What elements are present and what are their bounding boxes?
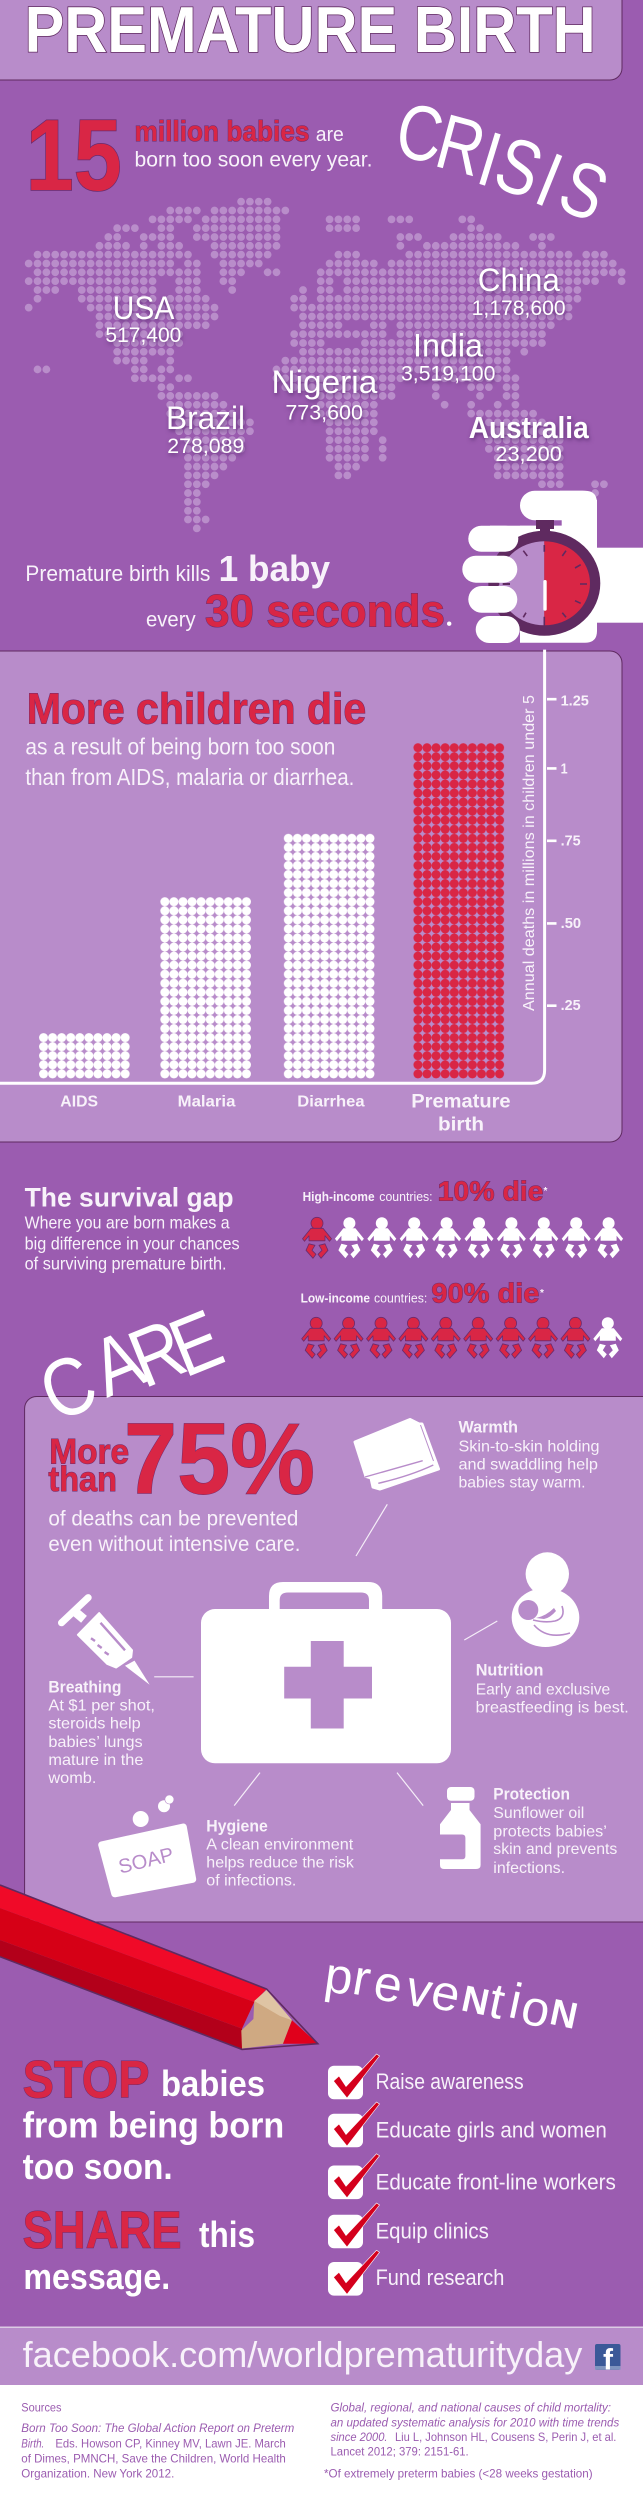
text block: nutrition: Early and exclusive: [476, 1681, 610, 1698]
icon: blanket: [355, 1420, 438, 1489]
text block: deaths prevented: even without intensive care.: [48, 1533, 300, 1556]
label: Australia: Australia: [469, 410, 589, 445]
text block: share this message: SHARE: [23, 2201, 182, 2260]
panel: facebook bar: [0, 2326, 643, 2385]
high-income heading: 10% die: [438, 1176, 543, 1207]
statement: 1 baby every 30 seconds: every: [146, 608, 196, 632]
section: survival gap text: big difference in your chances: [25, 1233, 240, 1253]
heading: care: E: [157, 1293, 235, 1395]
sources right column: Lancet 2012; 379: 2151-61.: [330, 2445, 469, 2459]
text block: stop babies: STOP: [23, 2050, 150, 2109]
heading: prevention: i: [504, 1973, 527, 2030]
label: China: [472, 262, 566, 320]
headline: 15 million babies: are: [316, 124, 344, 146]
label: Nigeria: [272, 364, 378, 425]
label: Australia: 23,200: [495, 443, 562, 466]
label: USA: 517,400: [105, 324, 181, 347]
sources left column: Organization. New York 2012.: [21, 2466, 174, 2480]
heading: prevention: [321, 1946, 581, 2039]
category labels: [60, 1092, 511, 1136]
sources left column: Eds. Howson CP, Kinney MV, Lawn JE. March: [55, 2436, 286, 2450]
heading: more children die: More children die: [27, 685, 366, 734]
item: educate girls and women: Educate girls and women: [376, 2118, 607, 2142]
panel: more children die: [0, 650, 622, 1142]
label: Australia: [469, 410, 589, 466]
label: Nigeria: Nigeria: [272, 364, 378, 400]
heading: crisis: [390, 86, 620, 238]
text block: share this message: this: [199, 2214, 255, 2255]
sources left column: Sources: [21, 2400, 62, 2414]
chart axes: .50: [561, 915, 581, 932]
heading: care: [27, 1293, 235, 1440]
low-income heading: *: [540, 1288, 544, 1299]
label: Nigeria: 773,600: [285, 402, 363, 425]
section: survival gap text: Where you are born makes a: [25, 1212, 230, 1232]
icon: first aid kit: [201, 1582, 451, 1763]
statement: 1 baby every 30 seconds: 1 baby: [219, 548, 330, 589]
text block: share this message: message.: [23, 2256, 170, 2297]
text block: breathing: womb.: [47, 1770, 96, 1787]
heading: prevention: r: [349, 1949, 375, 2007]
facebook url: facebook.com/worldprematurityday: [23, 2334, 582, 2375]
pictogram: high-income babies: [302, 1217, 623, 1258]
chart axes: 1: [561, 761, 568, 778]
heading: prevention: N: [547, 1991, 581, 2037]
statement: 1 baby every 30 seconds: [25, 548, 451, 636]
low-income heading: 90% die: [431, 1278, 539, 1309]
text block: warmth: Skin-to-skin holding: [458, 1438, 600, 1455]
item: educate front-line workers: [328, 2154, 616, 2199]
icon: red pencil: [0, 1885, 318, 2049]
headline: 15 million babies: 15: [26, 100, 122, 212]
text block: warmth: [458, 1418, 600, 1491]
label: Brazil: 278,089: [167, 435, 244, 458]
text block: hygiene: of infections.: [206, 1872, 296, 1890]
text block: protection: Sunflower oil: [493, 1805, 584, 1822]
connector lines: [154, 1504, 497, 1806]
item: fund research: [328, 2250, 504, 2296]
text block: protection: Protection: [493, 1785, 570, 1803]
heading: crisis: R: [428, 97, 494, 193]
high-income heading: *: [544, 1186, 548, 1197]
heading: more than 75%: [48, 1404, 315, 1516]
bar: malaria: [160, 897, 251, 1078]
text block: nutrition: [476, 1662, 629, 1716]
icon: facebook: f: [603, 2344, 614, 2377]
panel: sources footer: [0, 2385, 643, 2493]
label: India: [401, 327, 495, 385]
text block: warmth: and swaddling help: [458, 1456, 598, 1474]
bar: diarrhea: [284, 834, 374, 1078]
label: USA: [105, 290, 181, 347]
section: survival gap text: [25, 1183, 240, 1273]
low-income heading: Low-income: [301, 1291, 370, 1306]
label: India: India: [413, 327, 483, 363]
sources left column: of Dimes, PMNCH, Save the Children, World Health: [21, 2451, 286, 2465]
heading: prevention: o: [517, 1978, 555, 2039]
chart axes: [0, 650, 589, 1083]
text block: stop babies: from being born: [23, 2104, 284, 2146]
label: China: China: [478, 262, 560, 298]
label: China: 1,178,600: [472, 297, 566, 320]
text block: protection: infections.: [493, 1860, 565, 1877]
label: USA: USA: [113, 290, 175, 326]
item: educate girls and women: [328, 2102, 607, 2147]
bar chart: [0, 650, 589, 1136]
text block: chart intro: [25, 733, 354, 790]
text block: nutrition: Nutrition: [476, 1662, 543, 1680]
text block: breathing: At $1 per shot,: [48, 1698, 155, 1715]
text block: hygiene: Hygiene: [206, 1817, 268, 1835]
label: Brazil: Brazil: [166, 400, 245, 436]
text block: warmth: babies stay warm.: [458, 1474, 586, 1491]
checklist: [328, 2054, 616, 2296]
category labels: birth: [438, 1115, 484, 1136]
sources right column: Global, regional, and national causes of child mortality:: [330, 2400, 611, 2414]
high-income heading: [303, 1176, 548, 1207]
text block: breathing: steroids help: [48, 1716, 141, 1732]
chart axes: 1.25: [561, 692, 589, 709]
headline: 15 million babies: million babies: [134, 116, 310, 148]
map labels: [105, 262, 589, 466]
heading: crisis: I: [525, 136, 574, 223]
panel: care: [25, 1396, 643, 1922]
headline: 15 million babies: [26, 100, 373, 212]
item: educate front-line workers: Educate front-line workers: [376, 2169, 616, 2194]
text block: breathing: mature in the: [48, 1752, 143, 1769]
item: equip clinics: Equip clinics: [376, 2218, 489, 2244]
sources right column: an updated systematic analysis for 2010 with time trends: [330, 2416, 619, 2430]
bar: AIDS: [39, 1033, 130, 1078]
heading: prevention: t: [484, 1972, 510, 2030]
item: raise awareness: [328, 2054, 524, 2099]
bar: premature birth: [413, 743, 504, 1078]
category labels: Diarrhea: [297, 1094, 365, 1111]
icon: oil bottle: [440, 1787, 481, 1869]
item: equip clinics: [328, 2203, 489, 2248]
text block: warmth: Warmth: [458, 1418, 518, 1436]
text block: stop babies: too soon.: [23, 2146, 173, 2187]
heading: crisis: S: [548, 142, 620, 238]
heading: prevention: p: [321, 1946, 357, 2006]
text block: protection: protects babies’: [493, 1823, 607, 1840]
high-income heading: countries:: [379, 1189, 433, 1204]
text block: chart intro: than from AIDS, malaria or diarrhea.: [25, 764, 354, 790]
sources right column: Liu L, Johnson HL, Cousens S, Perin J, et al.: [395, 2430, 616, 2444]
heading: crisis: S: [485, 119, 553, 215]
heading: care: C: [27, 1336, 110, 1440]
text block: breathing: babies’ lungs: [48, 1734, 143, 1751]
chart axes: .25: [561, 997, 581, 1014]
dotted world map: [29, 202, 622, 528]
section: survival gap text: of surviving premature birth.: [25, 1253, 227, 1273]
text block: hygiene: A clean environment: [206, 1836, 354, 1853]
chart axes: .75: [561, 833, 581, 850]
category labels: Malaria: [178, 1094, 236, 1111]
heading: more than 75%: More: [49, 1432, 129, 1472]
heading: prevention: v: [401, 1960, 437, 2020]
text block: share this message: [23, 2201, 255, 2297]
item: fund research: Fund research: [376, 2265, 504, 2290]
heading: prevention: e: [370, 1954, 407, 2014]
heading: crisis: I: [469, 115, 511, 203]
statement: 1 baby every 30 seconds: Premature birth kills: [25, 561, 210, 586]
low-income heading: [301, 1278, 544, 1309]
heading: more than 75%: than: [48, 1459, 117, 1499]
sources left column: [21, 2400, 294, 2480]
sources right column: *Of extremely preterm babies (<28 weeks gestation): [324, 2466, 593, 2480]
sources right column: [324, 2400, 619, 2480]
label: Brazil: [166, 400, 245, 458]
heading: more than 75%: 75%: [124, 1404, 315, 1516]
icon: breastfeeding mother: [512, 1552, 579, 1647]
text block: deaths prevented: [48, 1508, 300, 1556]
text block: stop babies: babies: [161, 2063, 265, 2104]
section: survival gap text: The survival gap: [25, 1183, 234, 1213]
heading: prevention: N: [458, 1978, 493, 2023]
statement: 1 baby every 30 seconds: 30 seconds: [205, 586, 445, 636]
sources left column: Birth.: [21, 2436, 44, 2450]
text block: chart intro: as a result of being born too soon: [25, 733, 335, 759]
text block: nutrition: breastfeeding is best.: [476, 1699, 629, 1716]
icon: soap: [102, 1795, 193, 1894]
heading: care: A: [79, 1313, 157, 1415]
text block: protection: skin and prevents: [493, 1841, 617, 1858]
pictogram: low-income babies: [302, 1317, 622, 1358]
sources left column: Born Too Soon: The Global Action Report on Preterm: [21, 2421, 294, 2435]
heading: crisis: C: [390, 86, 450, 180]
sources right column: since 2000.: [330, 2430, 388, 2444]
icon: syringe: [62, 1598, 150, 1685]
text block: stop babies: [23, 2050, 284, 2187]
category labels: Premature: [411, 1092, 511, 1113]
text block: deaths prevented: of deaths can be prevented: [48, 1508, 298, 1531]
icon: soap: SOAP: [116, 1844, 176, 1879]
title panel: [0, 0, 622, 80]
category labels: AIDS: [60, 1094, 98, 1111]
headline: 15 million babies: born too soon every year.: [134, 148, 372, 172]
high-income heading: High-income: [303, 1189, 375, 1204]
item: raise awareness: Raise awareness: [376, 2069, 524, 2094]
axis title: Annual deaths in millions in children under 5: [521, 695, 538, 1011]
text block: breathing: [47, 1679, 155, 1787]
icon: facebook: [595, 2344, 620, 2377]
text block: protection: [493, 1785, 617, 1877]
low-income heading: countries:: [374, 1291, 427, 1306]
label: India: 3,519,100: [401, 362, 495, 385]
heading: prevention: e: [427, 1963, 465, 2023]
icon: hand holding stopwatch: [462, 491, 643, 643]
text block: hygiene: helps reduce the risk: [206, 1855, 355, 1872]
text block: hygiene: [206, 1817, 355, 1890]
text block: breathing: Breathing: [48, 1679, 121, 1697]
heading: care: R: [117, 1302, 198, 1406]
